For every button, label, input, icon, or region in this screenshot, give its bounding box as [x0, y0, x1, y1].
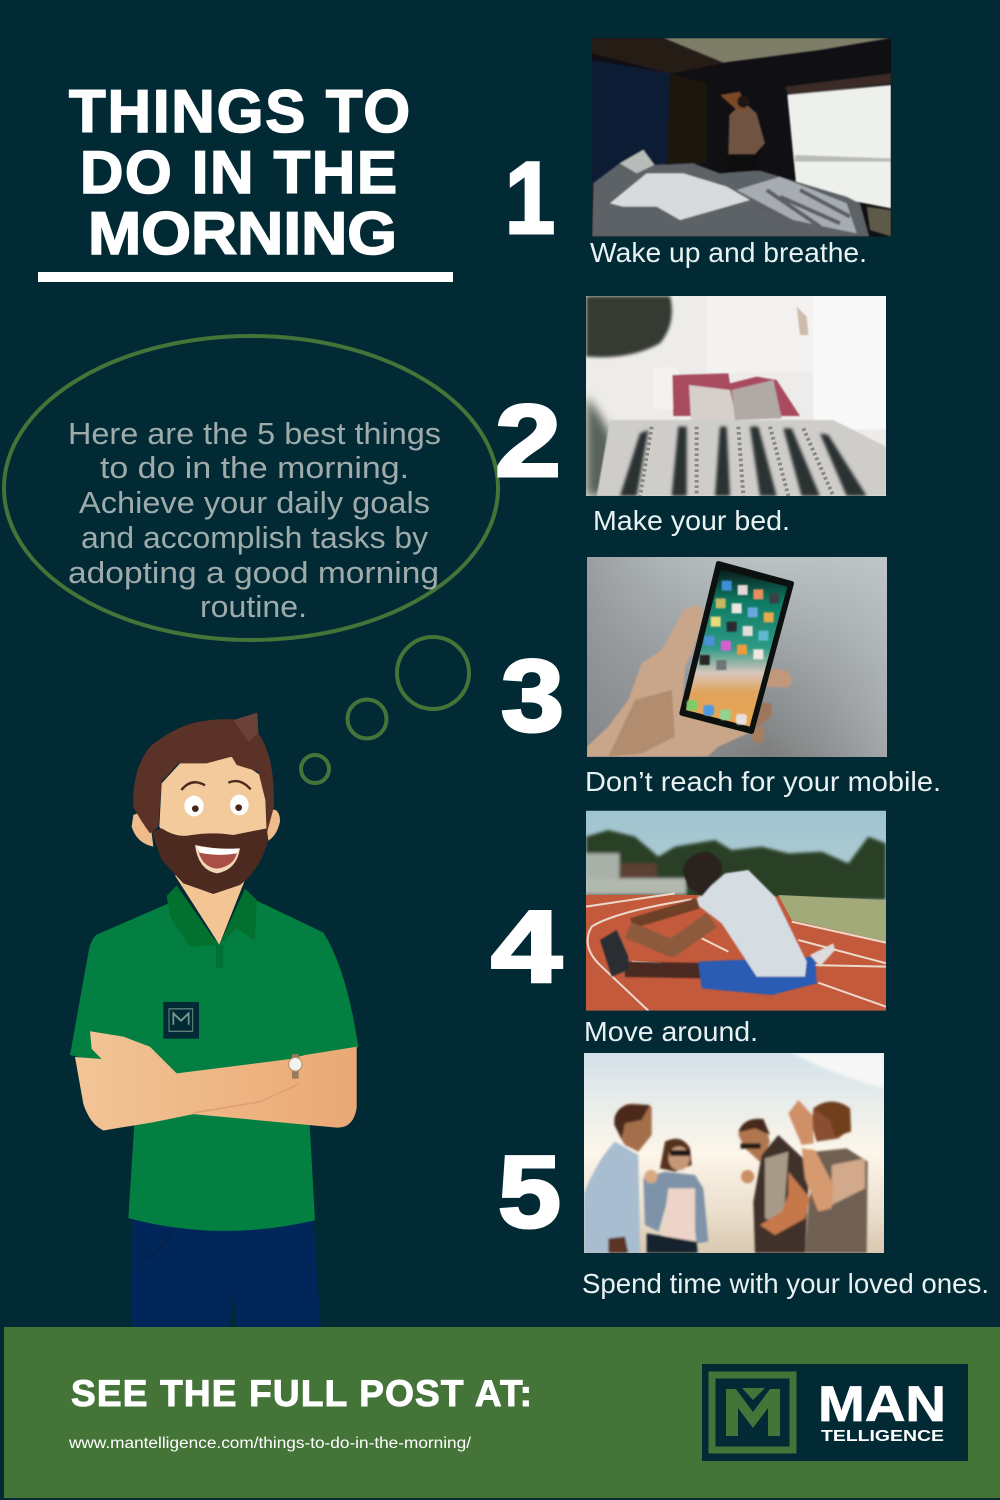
- caption 2: Make your bed.: [593, 505, 790, 536]
- left man: [584, 1142, 640, 1253]
- thought bubble with intro text: [4, 336, 498, 783]
- intro text: routine.: [200, 589, 307, 624]
- hair: [133, 713, 274, 833]
- logo wordmark: MAN: [818, 1376, 946, 1432]
- photo 3: hand holding smartphone: [587, 557, 887, 757]
- intro text: adopting a good morning: [68, 555, 439, 590]
- number 5: 5: [498, 1135, 561, 1249]
- title: DO IN THE: [80, 139, 397, 206]
- intro text: [68, 416, 441, 624]
- intro text: Achieve your daily goals: [79, 485, 430, 520]
- shirt badge: [163, 1002, 199, 1039]
- photo 2: neatly made bed: [586, 296, 886, 496]
- third man: [738, 1119, 770, 1163]
- face: [159, 757, 268, 877]
- logo: Mantelligence: TELLIGENCE: [821, 1428, 944, 1445]
- crossed arms: [75, 1031, 357, 1130]
- illustration: smiling bearded man with crossed arms: [70, 713, 358, 1328]
- intro text: and accomplish tasks by: [81, 520, 429, 555]
- athlete: [600, 852, 835, 995]
- photo 5: friends laughing outdoors: [584, 1053, 884, 1253]
- number 3: 3: [501, 639, 564, 753]
- footer heading: SEE THE FULL POST AT:: [71, 1373, 532, 1414]
- shirt: [70, 900, 358, 1231]
- caption 4: Move around.: [584, 1016, 758, 1047]
- fourth man: [812, 1102, 851, 1142]
- intro text: to do in the morning.: [100, 450, 409, 485]
- caption 3: Don’t reach for your mobile.: [585, 766, 941, 797]
- footer band: [4, 1327, 1000, 1498]
- neck: [175, 871, 248, 945]
- photo 1: man waking up beside bed: [592, 38, 891, 237]
- wristwatch: [289, 1054, 302, 1079]
- footer url: www.mantelligence.com/things-to-do-in-the-morning/: [68, 1435, 472, 1452]
- logo mark: [712, 1375, 793, 1450]
- title: [69, 78, 410, 267]
- beard: [152, 828, 268, 894]
- caption 5: Spend time with your loved ones.: [582, 1268, 989, 1299]
- intro text: Here are the 5 best things: [68, 416, 441, 451]
- head: [132, 713, 280, 894]
- caption 1: Wake up and breathe.: [590, 237, 867, 268]
- number 4: 4: [491, 890, 562, 1004]
- ears: [132, 813, 153, 847]
- number 1: 1: [505, 141, 555, 255]
- title: MORNING: [88, 200, 397, 267]
- number 2: 2: [495, 384, 561, 498]
- photo 4: man stretching on running track: [586, 811, 886, 1011]
- collar: [167, 886, 257, 947]
- title: THINGS TO: [69, 78, 410, 145]
- title underline: [38, 272, 453, 282]
- trousers: [131, 1218, 321, 1328]
- woman: [660, 1139, 692, 1172]
- logo: Mantelligence: [702, 1364, 968, 1461]
- mouth: [195, 845, 240, 873]
- eyes: [181, 781, 251, 816]
- body: [70, 871, 358, 1328]
